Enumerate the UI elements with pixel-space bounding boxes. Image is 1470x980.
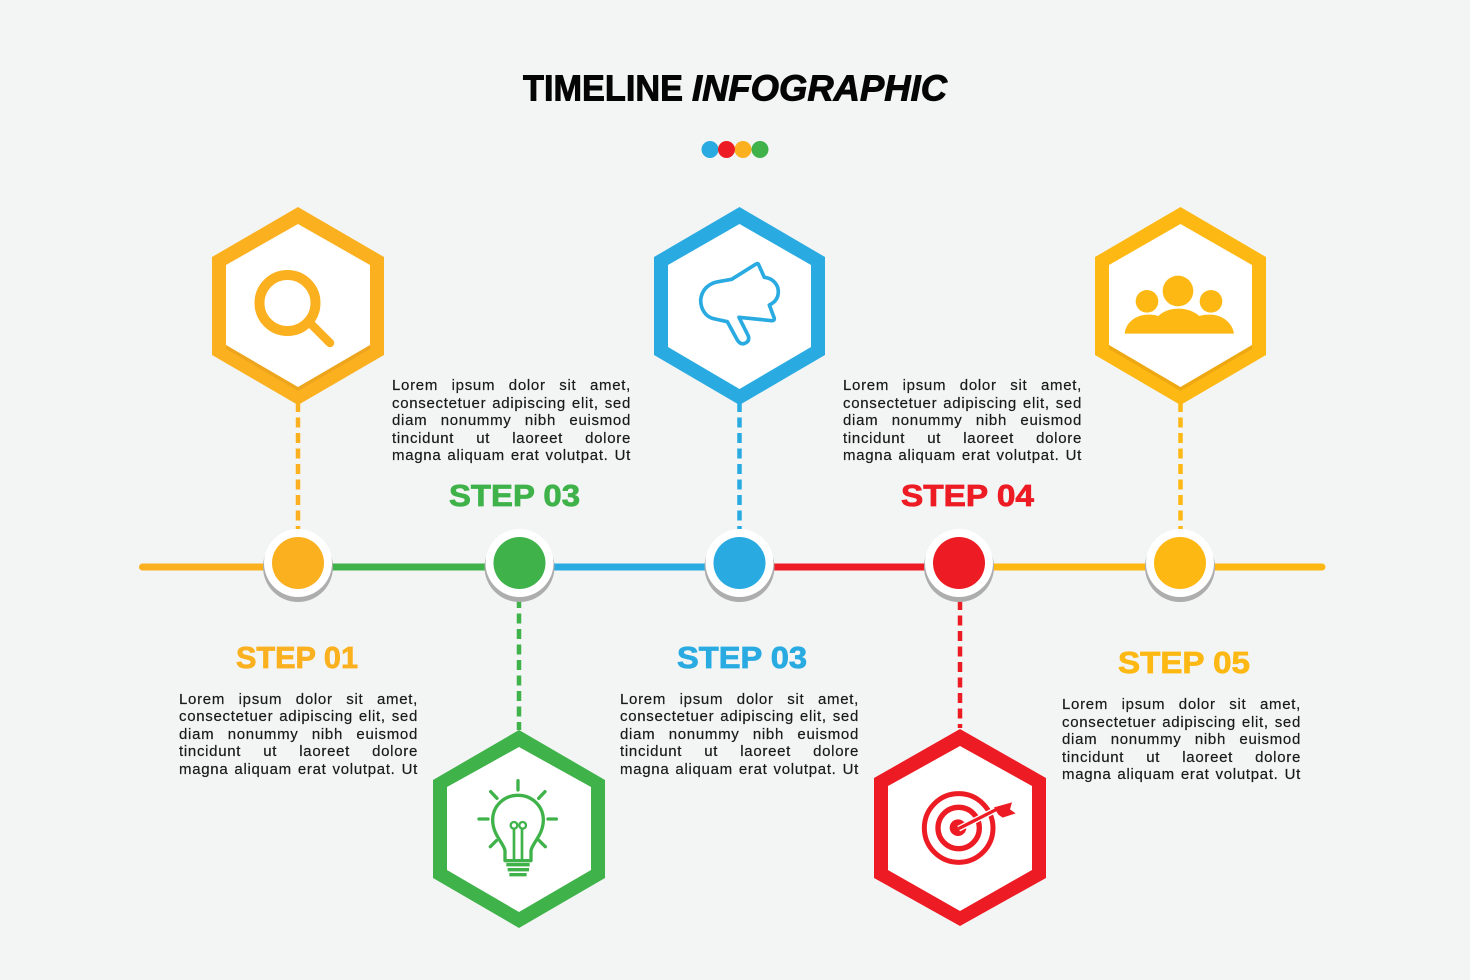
text block: top centre-right: consectetuer adipiscing elit, sed (843, 395, 1082, 412)
heading: step 03 blue: STEP 03 (677, 640, 807, 675)
dashed connector: step 02 (517, 598, 521, 730)
node: step 01 (263, 529, 333, 602)
text block: step 05: tincidunt ut laoreet dolore (1062, 749, 1301, 766)
text block: top centre-right: tincidunt ut laoreet dolore (843, 430, 1082, 447)
hexagon: step 01 search (212, 207, 384, 405)
title colour dots (702, 141, 768, 158)
dashed connector: step 04 (958, 600, 962, 728)
text block: step 03: consectetuer adipiscing elit, sed (620, 708, 859, 725)
heading: step 05: STEP 05 (1118, 645, 1250, 680)
text block: top centre-right: Lorem ipsum dolor sit amet, (843, 377, 1082, 394)
text block: step 03: diam nonummy nibh euismod (620, 726, 859, 743)
hexagon: step 05 team (1095, 207, 1266, 405)
hexagon: step 04 target (874, 729, 1046, 926)
icon: people (1125, 276, 1234, 334)
dashed connector: step 01 (296, 402, 300, 530)
icon: megaphone (701, 264, 778, 344)
text block: step 03 (620, 690, 859, 778)
text block: step 01: consectetuer adipiscing elit, sed (179, 708, 418, 725)
hexagon: step 03 megaphone (654, 207, 825, 405)
text block: step 01: Lorem ipsum dolor sit amet, (179, 690, 418, 708)
text block: top centre-right (843, 377, 1082, 464)
text block: top centre-right: diam nonummy nibh euismod (843, 412, 1082, 429)
heading: step 01: STEP 01 (236, 640, 358, 675)
text block: top centre-left: tincidunt ut laoreet dolore (392, 430, 631, 447)
hexagon: step 02 idea (433, 730, 605, 928)
icon: light bulb (479, 781, 556, 875)
title: TIMELINE (523, 68, 683, 108)
node: step 05 (1145, 529, 1215, 602)
text block: step 01: magna aliquam erat volutpat. Ut (179, 761, 418, 778)
text block: step 01: tincidunt ut laoreet dolore (179, 743, 418, 760)
text block: step 01 (179, 690, 418, 778)
icon: target with arrow (924, 794, 1016, 862)
title (523, 68, 948, 108)
timeline line (142, 564, 1322, 570)
text block: step 05 (1062, 696, 1301, 783)
text block: top centre-left: Lorem ipsum dolor sit amet, (392, 377, 631, 394)
text block: top centre-left: consectetuer adipiscing elit, sed (392, 395, 631, 412)
text block: step 01: diam nonummy nibh euismod (179, 726, 418, 743)
text block: step 05: magna aliquam erat volutpat. Ut (1062, 766, 1301, 783)
heading: step 03 green: STEP 03 (449, 478, 580, 513)
heading: step 04: STEP 04 (901, 478, 1035, 513)
text block: top centre-left (392, 377, 631, 464)
text block: top centre-right: magna aliquam erat volutpat. Ut (843, 447, 1082, 464)
text block: step 05: consectetuer adipiscing elit, sed (1062, 714, 1301, 731)
text block: step 05: Lorem ipsum dolor sit amet, (1062, 696, 1301, 713)
text block: step 03: tincidunt ut laoreet dolore (620, 743, 859, 760)
dashed connector: step 03 (737, 402, 742, 530)
text block: step 03: magna aliquam erat volutpat. Ut (620, 761, 859, 778)
node: step 03 (704, 529, 774, 602)
text block: top centre-left: magna aliquam erat volutpat. Ut (392, 447, 631, 464)
node: step 04 (924, 529, 994, 602)
text block: step 05: diam nonummy nibh euismod (1062, 731, 1301, 748)
icon: magnifying glass (260, 275, 330, 343)
node: step 02 (484, 529, 554, 602)
title: INFOGRAPHIC (692, 68, 948, 108)
text block: top centre-left: diam nonummy nibh euismod (392, 412, 631, 429)
dashed connector: step 05 (1178, 402, 1183, 530)
text block: step 03: Lorem ipsum dolor sit amet, (620, 690, 859, 708)
